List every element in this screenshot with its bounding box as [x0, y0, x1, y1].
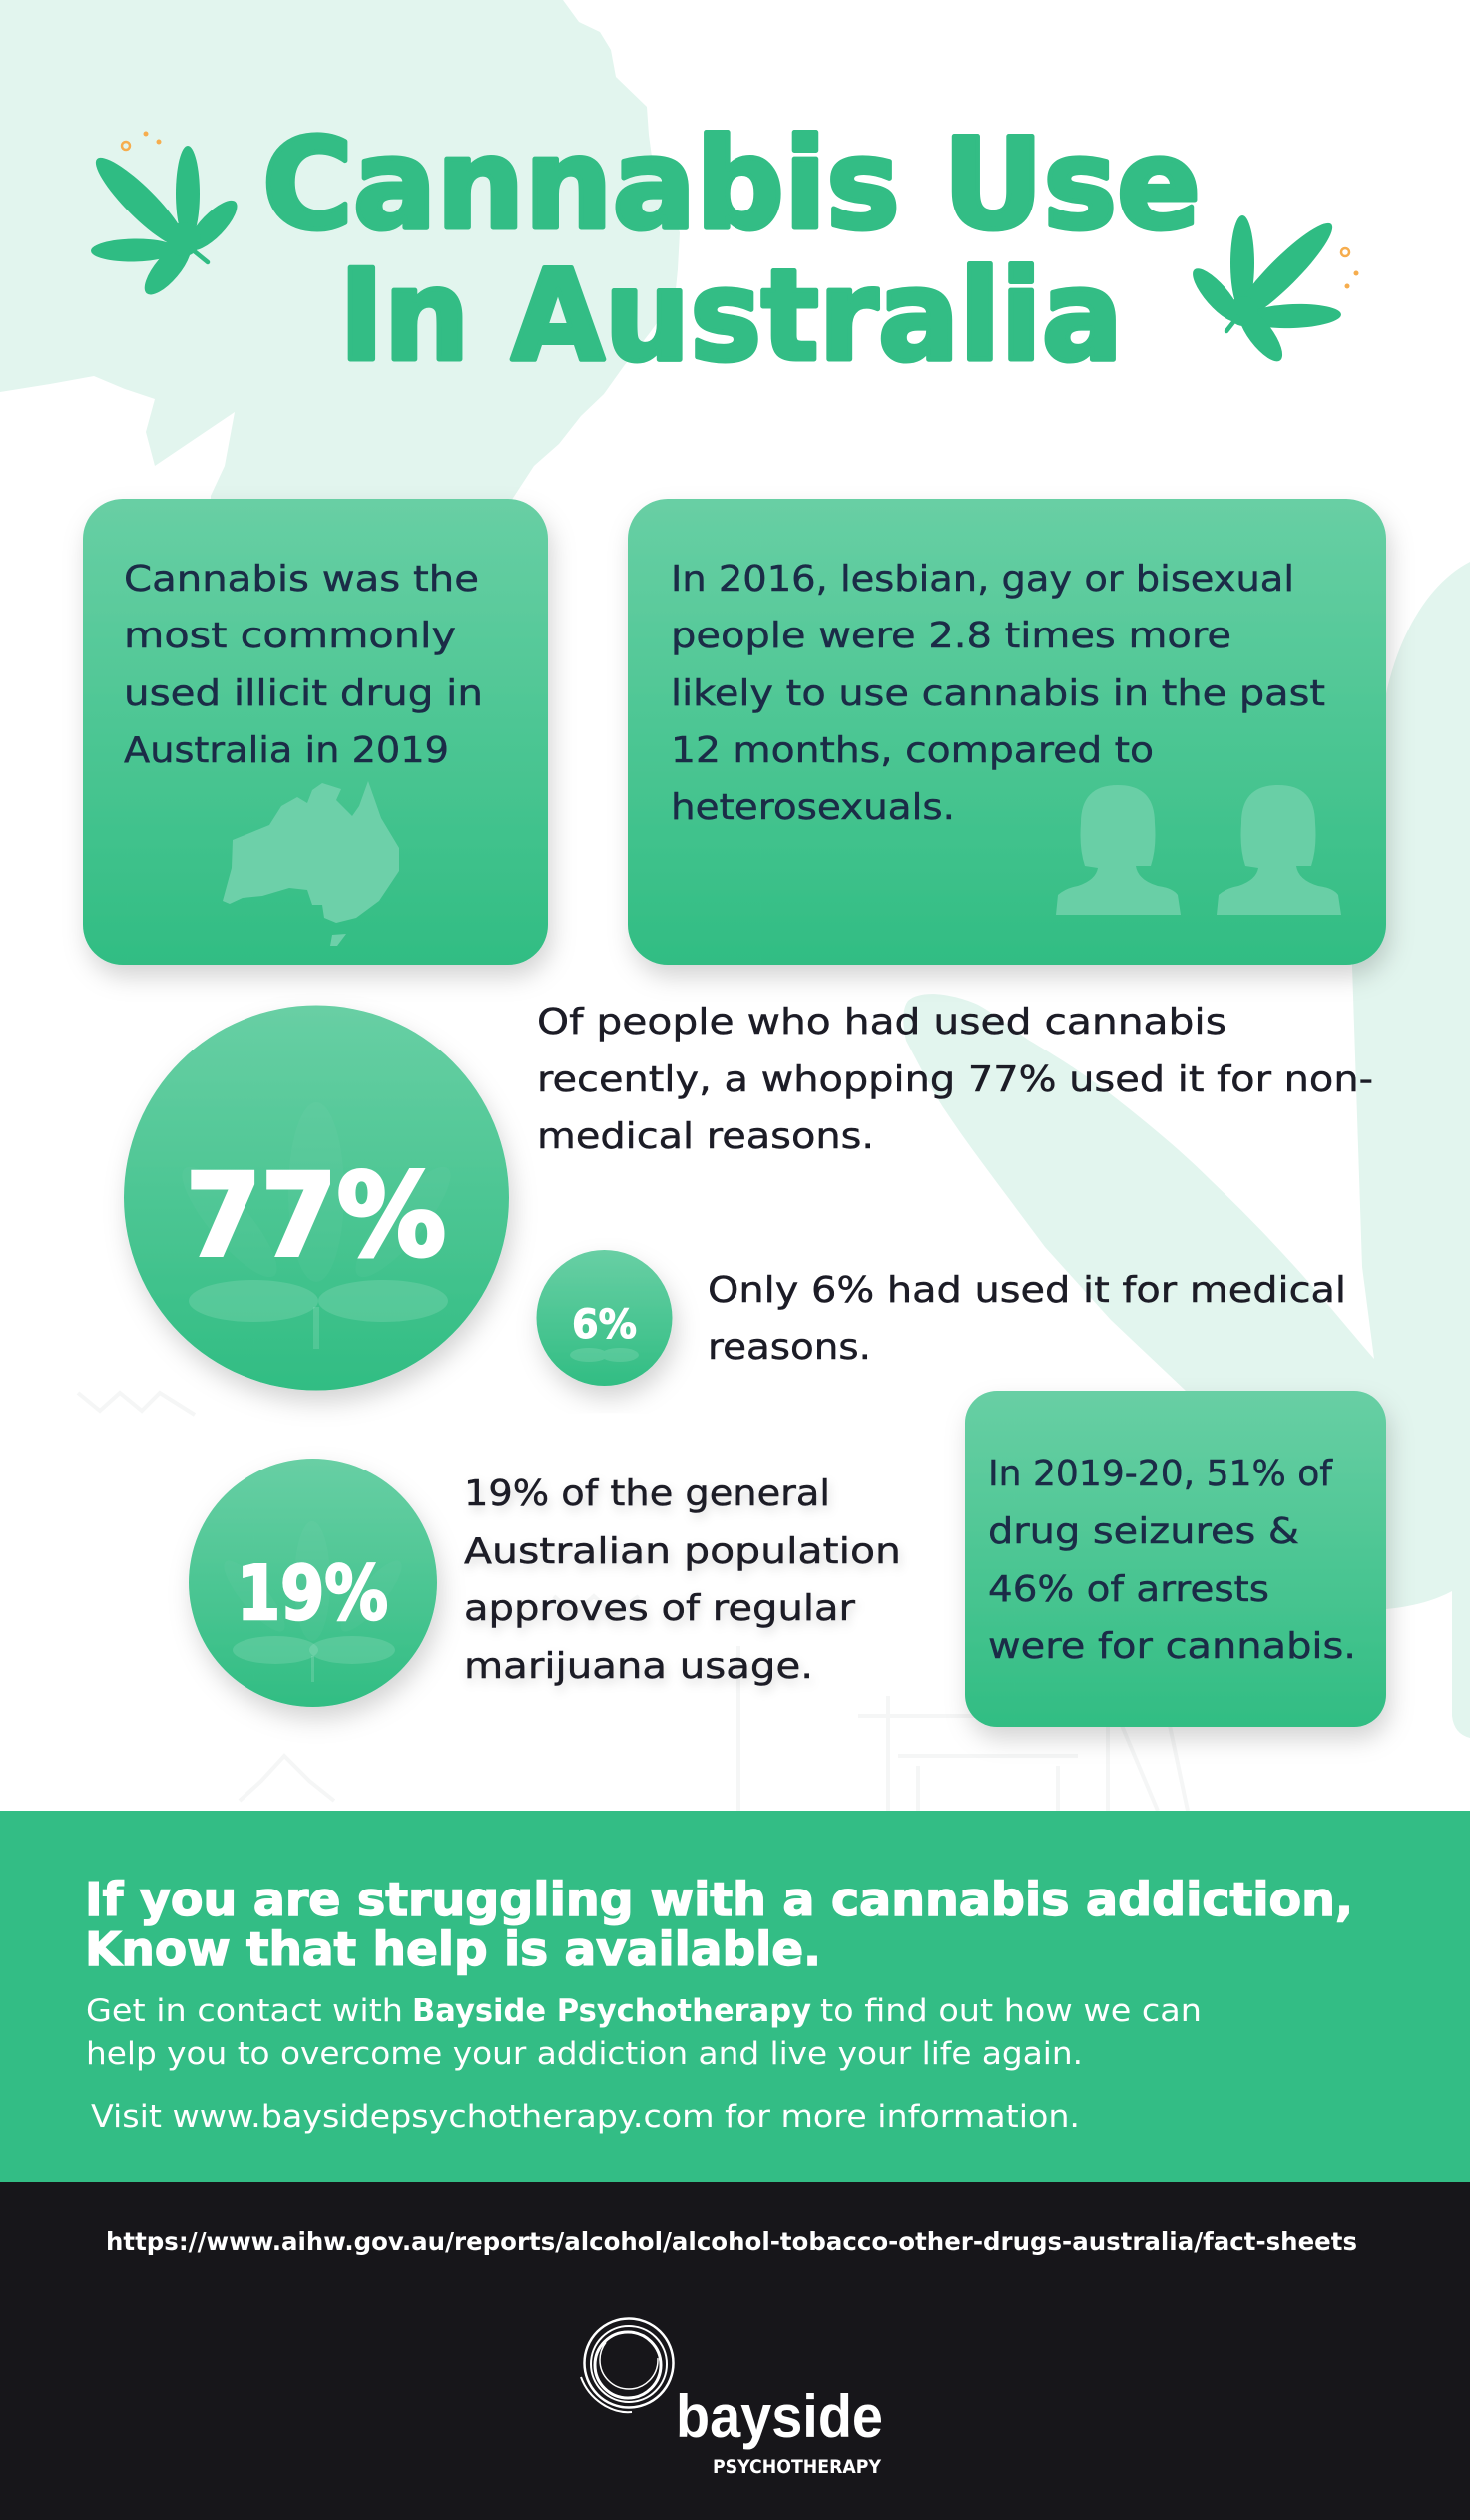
icon: two person silhouettes: [1056, 785, 1341, 915]
icon: faint leaf in small circle: [570, 1348, 639, 1362]
text: non-medical reasons: recently, a whopping 77% used it for non-: [537, 1059, 1373, 1100]
text: get in contact: Get in contact with: [86, 1993, 403, 2029]
text: card one: [124, 559, 483, 771]
panel: most commonly used drug: [83, 499, 548, 965]
text: card two: people were 2.8 times more: [671, 616, 1231, 656]
text: card one: Australia in 2019: [124, 730, 449, 771]
heading: help available: Know that help is available.: [85, 1922, 821, 1976]
panel: seizures and arrests: [965, 1391, 1386, 1727]
text: get in contact: Bayside Psychotherapy: [412, 1993, 811, 2029]
icon: faint leaf in medium circle: [216, 1521, 410, 1682]
title: In Australia: [339, 242, 1123, 389]
text: card three: [988, 1454, 1356, 1667]
text: non-medical reasons: Of people who had used cannabis: [537, 1002, 1226, 1043]
text: general population approval: approves of regular: [464, 1588, 855, 1629]
text: card two: [671, 559, 1325, 828]
stat number: 19%: [237, 1549, 388, 1637]
wordmark: bayside: [676, 2383, 883, 2450]
text: general population approval: marijuana usage.: [464, 1646, 813, 1687]
text: card three: In 2019-20, 51% of: [988, 1454, 1333, 1494]
text: card one: most commonly: [124, 616, 456, 656]
icon: Australia map silhouette: [223, 781, 399, 946]
stat number: 77%: [186, 1149, 446, 1282]
stat number: 6%: [572, 1302, 637, 1348]
text: general population approval: 19% of the general: [464, 1473, 830, 1514]
stat circle: 6%: [537, 1250, 673, 1386]
text: medical reasons: Only 6% had used it for medical: [708, 1270, 1346, 1311]
background: mint leaf shape on right: [903, 562, 1470, 1738]
text: card one: Cannabis was the: [124, 559, 479, 600]
text: source url: https://www.aihw.gov.au/reports/alcohol/alcohol-tobacco-other-drugs-australia/fact-sheets: [106, 2227, 1357, 2256]
heading: help available: [85, 1873, 1353, 1976]
text: card three: drug seizures &: [988, 1511, 1299, 1552]
panel: footer: [0, 2182, 1470, 2520]
text: card two: 12 months, compared to: [671, 730, 1154, 771]
icon: faint leaf in circle: [170, 1102, 463, 1349]
panel: lesbian gay bisexual statistic: [628, 499, 1386, 965]
text: card two: In 2016, lesbian, gay or bisexual: [671, 559, 1294, 600]
text: medical reasons: [708, 1270, 1346, 1368]
tagline: PSYCHOTHERAPY: [713, 2456, 881, 2478]
text: get in contact: help you to overcome your addiction and live your life again.: [86, 2036, 1083, 2072]
text: get in contact: [86, 1993, 1202, 2072]
stat circle: 19%: [189, 1459, 437, 1707]
text: general population approval: [464, 1473, 901, 1687]
text: medical reasons: reasons.: [708, 1327, 871, 1368]
text: non-medical reasons: medical reasons.: [537, 1116, 874, 1157]
panel: call to action band: [0, 1811, 1470, 2182]
text: card one: used illicit drug in: [124, 673, 483, 714]
stat circle: 77%: [124, 1006, 509, 1391]
background: mint Australia map shape: [0, 0, 680, 509]
heading: help available: If you are struggling with a cannabis addiction,: [85, 1873, 1353, 1926]
text: get in contact: to find out how we can: [820, 1993, 1202, 2029]
icon: cannabis leaf right: [1186, 214, 1359, 368]
title: [262, 111, 1201, 389]
text: non-medical reasons: [537, 1002, 1373, 1157]
text: card three: were for cannabis.: [988, 1626, 1356, 1667]
text: visit website: Visit www.baysidepsychotherapy.com for more information.: [91, 2099, 1080, 2135]
text: card three: 46% of arrests: [988, 1569, 1269, 1610]
text: general population approval: Australian population: [464, 1531, 901, 1572]
icon: swirl rings: [581, 2318, 673, 2412]
text: card two: heterosexuals.: [671, 787, 955, 828]
logo: bayside psychotherapy: [581, 2318, 883, 2478]
title: Cannabis Use: [262, 111, 1201, 257]
background: faint line decorations: [78, 1393, 1188, 1811]
icon: cannabis leaf left: [87, 132, 245, 301]
text: card two: likely to use cannabis in the past: [671, 673, 1325, 714]
